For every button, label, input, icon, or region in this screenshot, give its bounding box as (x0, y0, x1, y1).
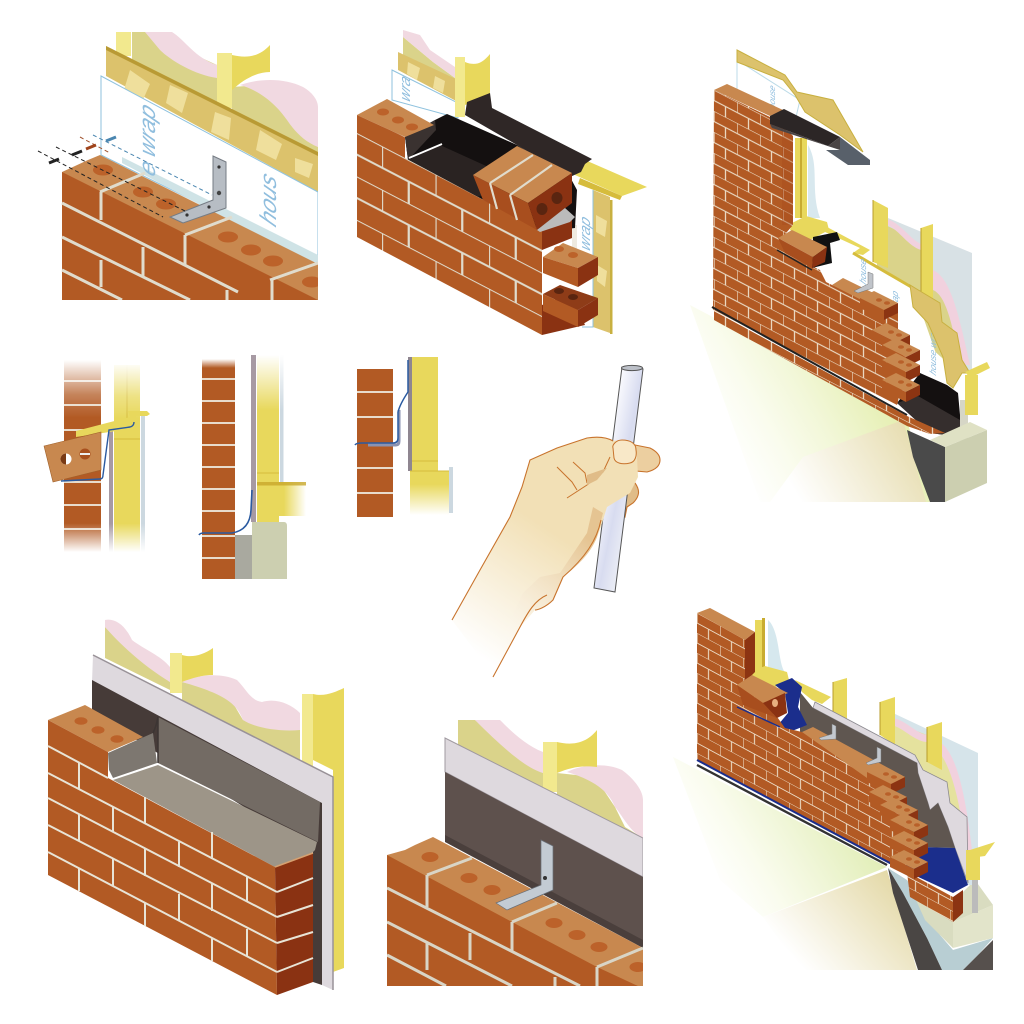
foundation (235, 522, 287, 579)
panel: full wall with black flashing (690, 50, 990, 502)
brick wall (697, 608, 963, 922)
right framing: wrap, OSB and joist: wrap (578, 213, 594, 254)
upper insulation and OSB: wra (398, 73, 414, 105)
panel: section B base of wall (199, 355, 306, 579)
dark membrane (92, 680, 322, 985)
window frame and wrap opening: house wrap (928, 326, 939, 377)
sill bricks and flashing (777, 230, 840, 270)
tilted brick (44, 432, 101, 482)
dark membrane (445, 772, 643, 948)
ground (690, 305, 930, 502)
dimension lines (38, 135, 212, 217)
panel: brick tie on dark membrane (387, 720, 646, 986)
lintel (770, 109, 870, 165)
grey flashing (108, 717, 320, 867)
house wrap and OSB upper: house (767, 83, 777, 111)
dark membrane (800, 692, 955, 848)
brick wall (357, 99, 585, 335)
toothed bricks (867, 765, 928, 879)
bricks (387, 837, 646, 986)
panel: grey flashing with brick wall (48, 620, 344, 995)
floor framing (966, 842, 995, 913)
sill (76, 411, 150, 437)
lilac board (813, 702, 968, 883)
OSB sheathing (106, 46, 318, 192)
sheathing and stud (251, 355, 284, 522)
flashing (368, 410, 399, 445)
window frame and wrap opening (790, 138, 947, 400)
metal tie (496, 840, 553, 910)
insulation and studs (458, 720, 643, 845)
bricks (64, 360, 101, 552)
brick course (62, 155, 322, 300)
toothed bricks (860, 291, 920, 402)
window frame (750, 618, 831, 704)
sill bricks (737, 675, 788, 727)
house wrap: hous (256, 168, 282, 231)
house wrap (101, 76, 318, 268)
floor framing and foundation (907, 362, 990, 502)
black flashing (405, 93, 592, 232)
panel: brick tie on house wrap (38, 32, 322, 300)
panel: section C floor joist (355, 357, 453, 517)
panel: full wall with blue flashing (673, 608, 995, 970)
insulation and studs (105, 620, 344, 972)
ties (819, 724, 881, 765)
back board and insulation (873, 200, 972, 372)
lilac board (445, 738, 643, 877)
metal brick tie (170, 156, 226, 223)
panel: window head flashing with bricks (357, 30, 647, 335)
hand and thumb (452, 437, 638, 677)
panel: hand holding rod (452, 365, 660, 677)
window frame and wrap opening: wrap (890, 289, 901, 313)
bricks (202, 359, 235, 579)
back board and insulation (883, 713, 978, 885)
upper insulation and OSB (392, 30, 490, 118)
black flashing at base (897, 373, 962, 437)
panel: section A tilted brick (44, 360, 150, 552)
small tie (854, 272, 873, 293)
rod (594, 365, 643, 592)
stud (408, 357, 453, 515)
studs (833, 678, 942, 770)
OSB lower (910, 285, 970, 388)
stud and sheathing (108, 362, 146, 552)
joist (257, 482, 306, 516)
blue flashing (775, 678, 968, 893)
right framing: wrap, OSB and joist (572, 160, 647, 334)
brick wall (48, 705, 313, 995)
projecting bricks (543, 243, 598, 327)
window frame and wrap opening: house (858, 257, 869, 286)
flashing (61, 422, 134, 481)
flashing (199, 490, 252, 535)
insulation and studs (116, 32, 318, 160)
house wrap: e wrap (135, 99, 161, 181)
ground (673, 757, 917, 970)
tilted bricks (473, 146, 575, 232)
brick wall (712, 84, 945, 434)
house wrap and OSB upper (737, 50, 863, 152)
lilac board (92, 655, 333, 990)
back fingers (615, 444, 660, 517)
dimension arrows (49, 137, 116, 163)
bricks (357, 369, 393, 517)
foundation and trench (888, 868, 993, 970)
